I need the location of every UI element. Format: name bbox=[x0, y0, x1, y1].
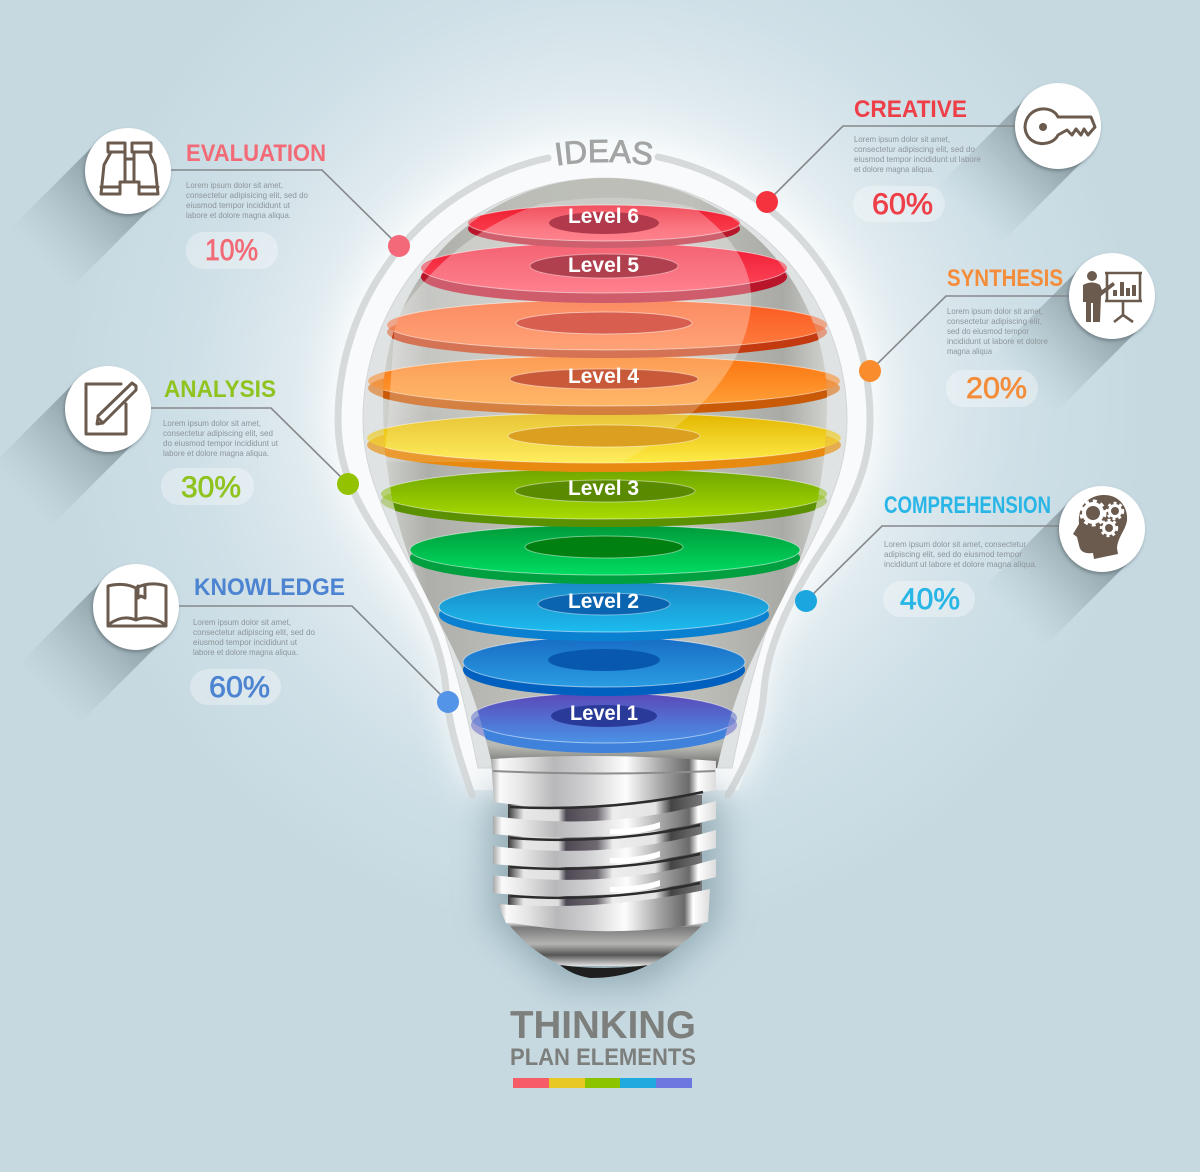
title bbox=[510, 1004, 696, 1088]
icon: pencil and paper bbox=[86, 383, 136, 434]
connector line bbox=[179, 606, 448, 702]
label: Level 1: Level 1 bbox=[570, 702, 638, 725]
percentage pill bbox=[853, 186, 945, 222]
long shadow bbox=[982, 499, 1132, 649]
disc hole: yellow bbox=[508, 425, 700, 447]
body text: Lorem ipsum dolor sit amet, consectetur bbox=[884, 539, 1026, 549]
body text: et dolore magna aliqua. bbox=[854, 164, 934, 174]
lightbulb bbox=[338, 152, 870, 795]
colour bar bbox=[513, 1078, 692, 1088]
body text: magna aliqua bbox=[947, 346, 992, 356]
panel: comprehension bbox=[795, 486, 1145, 649]
title: THINKING: THINKING bbox=[510, 1004, 696, 1047]
socket glow shadow bbox=[490, 790, 720, 985]
disc: orange bbox=[387, 300, 827, 358]
screw socket bbox=[490, 756, 720, 985]
body text bbox=[947, 306, 1048, 356]
body text: do eiusmod tempor incididunt ut bbox=[163, 438, 279, 448]
connector line bbox=[151, 408, 348, 484]
body text: eiusmod tempor incididunt ut bbox=[186, 200, 291, 210]
body text: labore et dolore magna aliqua. bbox=[163, 448, 269, 458]
icon: presenter with chart bbox=[1083, 271, 1142, 322]
panel: knowledge bbox=[16, 564, 459, 727]
body text bbox=[854, 134, 981, 174]
body text: consectetur adipisicing elit, sed do bbox=[186, 190, 308, 200]
percentage: 40% bbox=[900, 583, 960, 616]
icon circle bbox=[1015, 83, 1101, 169]
percentage pill bbox=[946, 370, 1038, 407]
percentage: 60% bbox=[872, 188, 933, 221]
body text: Lorem ipsum dolor sit amet, bbox=[163, 418, 261, 428]
percentage pill bbox=[186, 232, 278, 269]
body text: consectetur adipiscing elit, sed do bbox=[854, 144, 975, 154]
dot bbox=[756, 191, 778, 213]
heading: COMPREHENSION bbox=[884, 492, 1051, 519]
disc: level 6 bbox=[468, 205, 740, 248]
glass outer shell bbox=[363, 178, 847, 768]
body text: eiusmod tempor incididunt ut labore bbox=[854, 154, 981, 164]
label: Level 3: Level 3 bbox=[568, 477, 639, 500]
disc: level 1 bbox=[471, 693, 737, 753]
panel: analysis bbox=[0, 366, 359, 529]
disc: green bbox=[410, 525, 800, 584]
collar lower edge bbox=[510, 792, 703, 808]
thread band 3 bbox=[493, 859, 716, 898]
percentage: 10% bbox=[205, 234, 258, 267]
connector line bbox=[767, 126, 1015, 202]
label: Level 2: Level 2 bbox=[568, 590, 639, 613]
body text: sed do eiusmod tempor bbox=[947, 326, 1029, 336]
disc: level 4 bbox=[368, 356, 840, 415]
percentage: 20% bbox=[966, 372, 1027, 405]
disc hole: level 5 bbox=[530, 254, 678, 278]
icon circle bbox=[85, 128, 171, 214]
socket bowl bbox=[507, 922, 704, 966]
label: Level 5: Level 5 bbox=[568, 254, 639, 277]
glass interior bbox=[383, 178, 827, 768]
long shadow bbox=[0, 379, 138, 529]
collar rim line bbox=[493, 771, 715, 774]
socket shadow in glass bbox=[488, 748, 722, 768]
long shadow bbox=[992, 266, 1142, 416]
long shadow bbox=[8, 141, 158, 291]
body text bbox=[163, 418, 279, 458]
outer contour ring bbox=[338, 157, 870, 795]
body text bbox=[884, 539, 1037, 569]
heading: CREATIVE bbox=[854, 96, 967, 123]
disc: level 3 bbox=[381, 469, 827, 527]
long shadow bbox=[938, 96, 1088, 246]
disc hole: level 6 bbox=[549, 212, 659, 234]
panel: evaluation bbox=[8, 128, 410, 291]
percentage pill bbox=[190, 669, 281, 705]
dot bbox=[795, 590, 817, 612]
connector line bbox=[806, 526, 1059, 601]
icon circle bbox=[93, 564, 179, 650]
subtitle: PLAN ELEMENTS: PLAN ELEMENTS bbox=[510, 1044, 696, 1071]
disc: level 2 bbox=[439, 582, 769, 641]
dot bbox=[388, 235, 410, 257]
body text: consectetur adipiscing elit, bbox=[947, 316, 1042, 326]
panel: creative bbox=[756, 83, 1101, 246]
heading: EVALUATION bbox=[186, 140, 326, 167]
heading: IDEAS: IDEAS bbox=[556, 140, 652, 166]
body text: adipiscing elit, sed do eiusmod tempor bbox=[884, 549, 1022, 559]
label: Level 4: Level 4 bbox=[568, 365, 639, 388]
body text: Lorem ipsum dolor sit amet, bbox=[186, 180, 283, 190]
body text: consectetur adipiscing elit, sed do bbox=[193, 627, 315, 637]
connector line bbox=[870, 296, 1070, 371]
body text: incididunt ut labore et dolore bbox=[947, 336, 1048, 346]
thread band 1 bbox=[493, 801, 716, 840]
body text bbox=[193, 617, 315, 657]
panel: synthesis bbox=[859, 253, 1155, 416]
heading: KNOWLEDGE bbox=[194, 574, 345, 601]
disc hole: level 4 bbox=[510, 369, 698, 389]
long shadow bbox=[16, 577, 166, 727]
dot bbox=[859, 360, 881, 382]
connector line bbox=[171, 170, 399, 246]
icon: key bbox=[1025, 109, 1095, 144]
body text: labore et dolore magna aliqua. bbox=[193, 647, 298, 657]
percentage: 60% bbox=[209, 671, 270, 704]
thread band 2 bbox=[493, 830, 716, 869]
percentage pill bbox=[161, 468, 254, 505]
icon circle bbox=[65, 366, 151, 452]
label: Level 6: Level 6 bbox=[568, 205, 639, 228]
bulb halo bbox=[338, 152, 870, 790]
icon: binoculars bbox=[101, 143, 158, 194]
body text: consectetur adipiscing elit, sed bbox=[163, 428, 273, 438]
dot bbox=[437, 691, 459, 713]
heading: ANALYSIS bbox=[164, 376, 276, 403]
socket collar bbox=[491, 756, 716, 808]
disc: yellow bbox=[367, 413, 841, 472]
body text: eiusmod tempor incididunt ut bbox=[193, 637, 298, 647]
thread core bbox=[508, 795, 702, 915]
white band inside ring bbox=[338, 152, 870, 790]
lower collar bbox=[498, 889, 710, 932]
body text: incididunt ut labore et dolore magna aliqua. bbox=[884, 559, 1037, 569]
icon circle bbox=[1069, 253, 1155, 339]
disc hole: orange bbox=[516, 312, 692, 334]
glass reflection highlight bbox=[385, 198, 751, 462]
icon circle bbox=[1059, 486, 1145, 572]
socket tip bbox=[560, 965, 648, 978]
dot bbox=[337, 473, 359, 495]
percentage: 30% bbox=[181, 471, 241, 504]
icon: head with gears bbox=[1073, 495, 1127, 559]
percentage pill bbox=[883, 581, 975, 617]
body text: Lorem ipsum dolor sit amet, bbox=[193, 617, 291, 627]
body text: labore et dolore magna aliqua. bbox=[186, 210, 291, 220]
heading: SYNTHESIS bbox=[947, 265, 1063, 292]
disc: blue bbox=[463, 637, 745, 696]
body text: Lorem ipsum dolor sit amet, bbox=[947, 306, 1043, 316]
disc: level 5 bbox=[421, 243, 787, 303]
body text: Lorem ipsum dolor sit amet, bbox=[854, 134, 950, 144]
body text bbox=[186, 180, 308, 220]
icon: open book bbox=[108, 584, 166, 626]
